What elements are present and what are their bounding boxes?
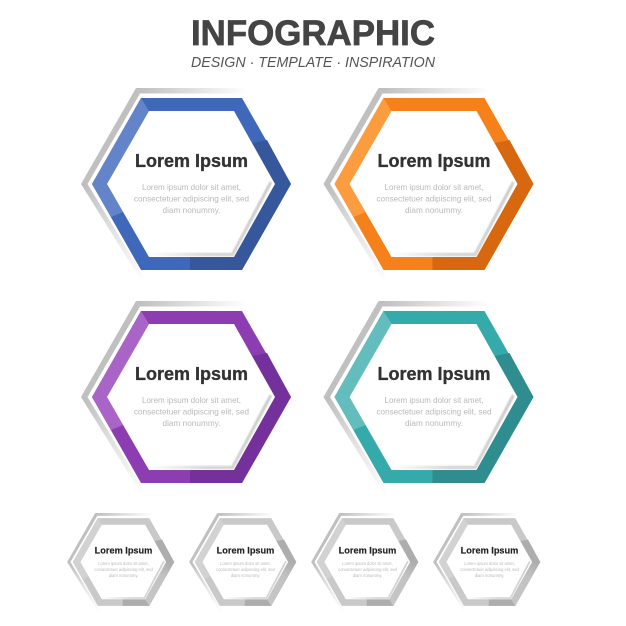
panel: purple hexagon — [81, 301, 291, 495]
panel: orange hexagon: Lorem ipsum dolor sit amet, — [384, 182, 484, 192]
panel: teal hexagon: diam nonummy. — [405, 418, 463, 428]
panel: small gray hexagon 4 — [433, 513, 540, 612]
panel: blue hexagon: diam nonummy. — [162, 205, 220, 215]
panel: small gray hexagon 2 — [189, 513, 296, 612]
panel: small gray hexagon 1: Lorem Ipsum — [95, 545, 152, 555]
panel: purple hexagon: Lorem ipsum dolor sit amet, — [142, 395, 241, 405]
panel: small gray hexagon 4: Lorem ipsum dolor sit amet, — [464, 561, 515, 566]
panel: small gray hexagon 4: diam nonummy. — [475, 573, 504, 578]
panel: blue hexagon: Lorem Ipsum — [135, 151, 248, 171]
panel: small gray hexagon 2: diam nonummy. — [231, 573, 260, 578]
panel: small gray hexagon 3: Lorem Ipsum — [339, 545, 396, 555]
panel: teal hexagon: Lorem Ipsum — [378, 364, 490, 384]
panel: small gray hexagon 2: Lorem Ipsum — [217, 545, 274, 555]
panel: small gray hexagon 1: diam nonummy. — [109, 573, 138, 578]
panel: small gray hexagon 3: Lorem ipsum dolor sit amet, — [342, 561, 393, 566]
panel: blue hexagon — [81, 88, 291, 282]
panel: blue hexagon: consectetuer adipiscing elit, sed — [134, 194, 249, 204]
panel: small gray hexagon 4: consectetuer adipiscing elit, sed — [460, 567, 519, 572]
title: INFOGRAPHIC — [191, 14, 435, 53]
panel: teal hexagon — [324, 301, 534, 495]
panel: orange hexagon: diam nonummy. — [405, 205, 463, 215]
panel: purple hexagon: consectetuer adipiscing elit, sed — [134, 406, 249, 416]
panel: teal hexagon: Lorem ipsum dolor sit amet, — [384, 395, 484, 405]
panel: small gray hexagon 3: consectetuer adipiscing elit, sed — [338, 567, 397, 572]
panel: small gray hexagon 2: Lorem ipsum dolor sit amet, — [220, 561, 271, 566]
panel: orange hexagon: consectetuer adipiscing elit, sed — [376, 194, 492, 204]
panel: teal hexagon: consectetuer adipiscing elit, sed — [376, 406, 492, 416]
panel: blue hexagon: Lorem ipsum dolor sit amet, — [142, 182, 241, 192]
panel: orange hexagon — [324, 88, 534, 282]
panel: small gray hexagon 1: Lorem ipsum dolor sit amet, — [98, 561, 149, 566]
panel: purple hexagon: diam nonummy. — [162, 418, 220, 428]
subtitle: DESIGN · TEMPLATE · INSPIRATION — [191, 55, 436, 71]
panel: small gray hexagon 1: consectetuer adipiscing elit, sed — [94, 567, 153, 572]
panel: purple hexagon: Lorem Ipsum — [135, 364, 248, 384]
panel: orange hexagon: Lorem Ipsum — [378, 151, 490, 171]
panel: small gray hexagon 1 — [67, 513, 174, 612]
panel: small gray hexagon 3 — [311, 513, 418, 612]
panel: small gray hexagon 3: diam nonummy. — [353, 573, 382, 578]
panel: small gray hexagon 2: consectetuer adipiscing elit, sed — [216, 567, 275, 572]
panel: small gray hexagon 4: Lorem Ipsum — [461, 545, 518, 555]
